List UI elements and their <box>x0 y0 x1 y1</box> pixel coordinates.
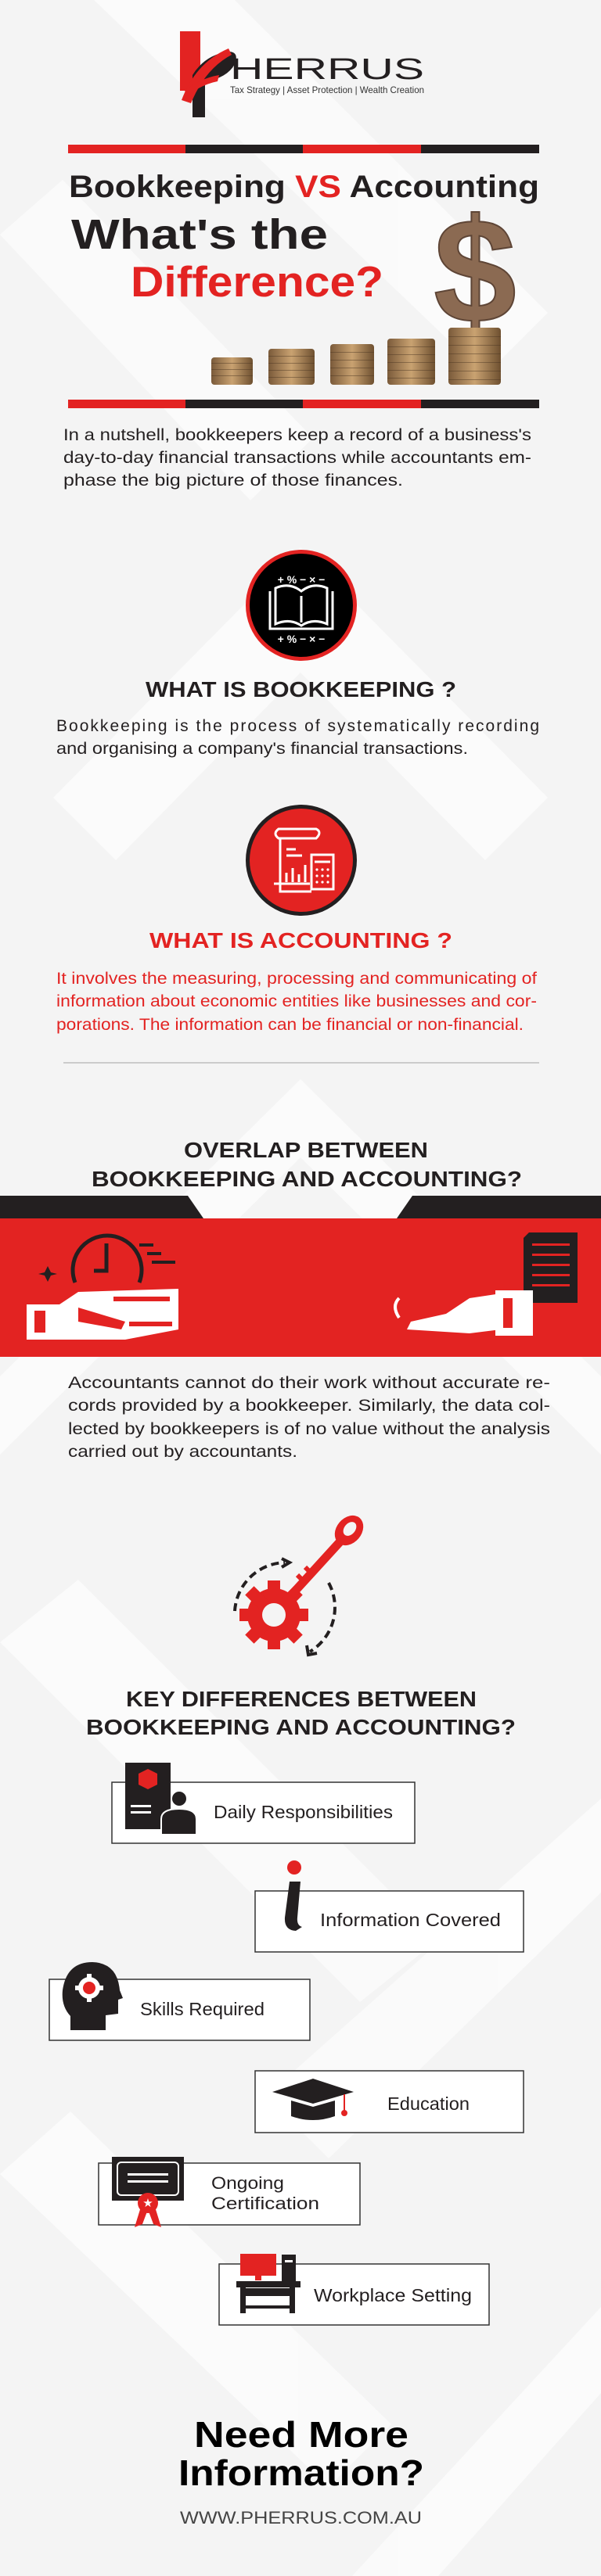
bookkeeping paragraph <box>56 717 539 758</box>
item: skills required: Skills Required <box>140 1999 265 2019</box>
item: information covered <box>255 1860 524 1952</box>
bottom stripe <box>68 400 539 408</box>
title <box>69 170 539 306</box>
heading: overlap: BOOKKEEPING AND ACCOUNTING? <box>92 1167 522 1191</box>
item: education: Education <box>387 2093 470 2114</box>
item: skills required <box>49 1962 310 2040</box>
heading: overlap: OVERLAP BETWEEN <box>184 1138 428 1162</box>
item: education <box>255 2071 524 2133</box>
title: What's the <box>71 211 328 258</box>
heading: overlap <box>92 1138 522 1191</box>
bookkeeping paragraph: and organising a company's financial transactions. <box>56 740 468 758</box>
icon: gear with key and arrows <box>235 1510 369 1655</box>
panel: overlap band <box>0 1196 601 1357</box>
item: workplace setting: Workplace Setting <box>314 2285 472 2305</box>
website url: WWW.PHERRUS.COM.AU <box>180 2508 422 2528</box>
icon: hand with clock <box>27 1236 178 1340</box>
item: information covered: Information Covered <box>320 1910 501 1930</box>
call to action: Information? <box>178 2452 424 2493</box>
overlap paragraph: cords provided by a bookkeeper. Similarly, the data col- <box>68 1397 550 1415</box>
overlap paragraph: carried out by accountants. <box>68 1443 297 1461</box>
heading: what is bookkeeping: WHAT IS BOOKKEEPING ? <box>146 677 456 701</box>
icon: hand receiving document <box>395 1232 578 1336</box>
logo <box>180 31 424 117</box>
accounting paragraph <box>56 970 537 1034</box>
overlap paragraph <box>68 1374 550 1461</box>
heading: key differences: KEY DIFFERENCES BETWEEN <box>126 1687 477 1711</box>
item: daily responsibilities: Daily Responsibilities <box>214 1802 393 1822</box>
icon: book in black circle <box>246 550 357 661</box>
overlap paragraph: lected by bookkeepers is of no value without the analysis <box>68 1420 550 1438</box>
illustration: dollar and coins: $ <box>434 188 516 354</box>
intro paragraph: phase the big picture of those finances. <box>63 472 403 490</box>
item: ongoing certification: ★ <box>142 2197 153 2210</box>
overlap paragraph: Accountants cannot do their work without accurate re- <box>68 1374 550 1392</box>
accounting paragraph: information about economic entities like businesses and cor- <box>56 992 537 1010</box>
top stripe <box>68 145 539 153</box>
icon: accounting report in red circle <box>246 805 357 916</box>
item: ongoing certification <box>99 2157 360 2227</box>
heading: key differences <box>86 1687 516 1739</box>
call to action: Need More <box>194 2414 408 2455</box>
intro paragraph: In a nutshell, bookkeepers keep a record of a business's <box>63 426 531 444</box>
icon: book in black circle: + % − × − <box>278 633 325 645</box>
item: ongoing certification: Certification <box>211 2194 319 2213</box>
icon: book in black circle: + % − × − <box>278 573 325 586</box>
heading: key differences: BOOKKEEPING AND ACCOUNTING? <box>86 1715 516 1739</box>
illustration: dollar and coins <box>211 188 516 385</box>
call to action <box>178 2414 424 2493</box>
item: daily responsibilities <box>112 1763 415 1843</box>
title: Difference? <box>131 257 383 306</box>
heading: what is accounting: WHAT IS ACCOUNTING ? <box>149 928 452 953</box>
bookkeeping paragraph: Bookkeeping is the process of systematically recording <box>56 717 539 735</box>
intro paragraph <box>63 426 531 490</box>
accounting paragraph: porations. The information can be financial or non-financial. <box>56 1016 524 1034</box>
accounting paragraph: It involves the measuring, processing and communicating of <box>56 970 537 988</box>
intro paragraph: day-to-day financial transactions while accountants em- <box>63 449 531 467</box>
item: workplace setting <box>219 2254 489 2325</box>
logo: HERRUS <box>230 53 424 86</box>
logo: Tax Strategy | Asset Protection | Wealth Creation <box>230 84 424 95</box>
title: Bookkeeping VS Accounting <box>69 170 539 204</box>
item: ongoing certification: Ongoing <box>211 2173 284 2193</box>
